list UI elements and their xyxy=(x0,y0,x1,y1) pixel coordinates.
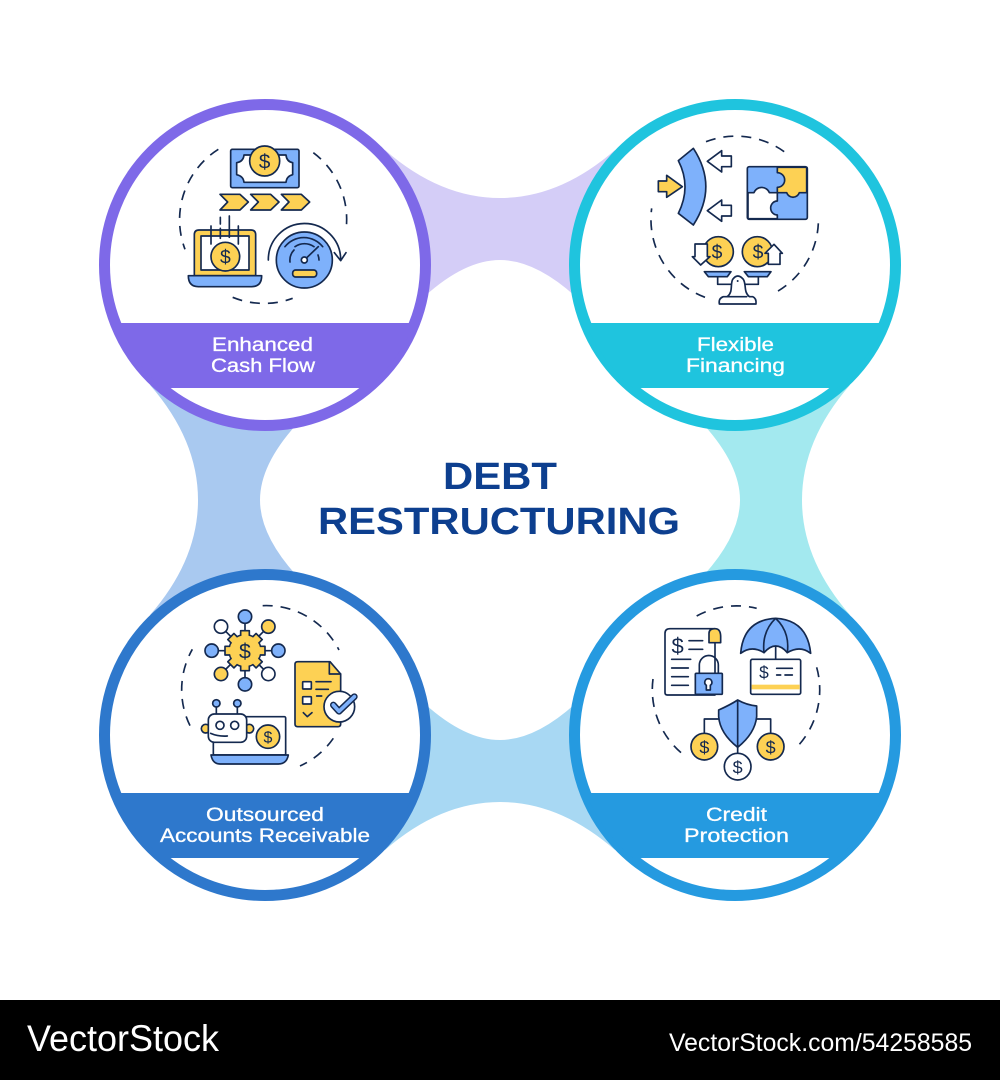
title xyxy=(318,456,680,543)
footer url: VectorStock.com/54258585 xyxy=(669,1029,972,1057)
footer bar xyxy=(0,1000,1000,1080)
icon: flexible financing: $ xyxy=(753,243,764,264)
banner: Flexible Financing xyxy=(591,323,879,388)
connector: top xyxy=(385,150,615,296)
icon: cash flow xyxy=(180,146,347,303)
label: Credit Protection: Protection xyxy=(684,826,789,847)
label: Credit Protection: Credit xyxy=(706,805,768,826)
connector: left xyxy=(150,385,296,615)
icon: cash flow: $ xyxy=(220,248,231,269)
connector: right xyxy=(704,385,850,615)
connector: bottom xyxy=(385,704,615,850)
icon: credit protection: $ xyxy=(759,662,769,682)
label: Credit Protection xyxy=(684,805,789,847)
label: Flexible Financing xyxy=(686,335,785,377)
icon: credit protection: $ xyxy=(699,737,709,757)
icon: credit protection: $ xyxy=(733,757,743,777)
icon: credit protection: $ xyxy=(672,633,684,658)
banner: Enhanced Cash Flow xyxy=(121,323,409,388)
label: Outsourced Accounts Receivable: Outsourced xyxy=(206,805,324,826)
icon: outsourced receivables: $ xyxy=(239,639,251,663)
panel: Outsourced Accounts Receivable xyxy=(100,574,430,896)
icon: flexible financing: $ xyxy=(712,243,723,264)
icon: credit protection: $ xyxy=(766,737,776,757)
label: Flexible Financing: Flexible xyxy=(697,335,774,356)
icon: flexible financing xyxy=(651,136,818,304)
banner: Outsourced Accounts Receivable xyxy=(121,793,409,858)
icon: outsourced receivables: $ xyxy=(264,729,273,746)
banner: Credit Protection xyxy=(591,793,879,858)
title: RESTRUCTURING xyxy=(318,501,680,543)
icon: credit protection xyxy=(652,606,820,780)
footer logo text: VectorStock xyxy=(27,1018,219,1059)
icon: outsourced receivables xyxy=(182,606,355,766)
panel: Flexible Financing xyxy=(570,104,900,426)
label: Enhanced Cash Flow: Cash Flow xyxy=(211,356,315,377)
icon: cash flow: $ xyxy=(259,150,271,173)
label: Outsourced Accounts Receivable xyxy=(160,805,370,847)
panel: Enhanced Cash Flow xyxy=(100,104,430,426)
label: Enhanced Cash Flow: Enhanced xyxy=(212,335,313,356)
label: Outsourced Accounts Receivable: Accounts Receivable xyxy=(160,826,370,847)
label: Enhanced Cash Flow xyxy=(211,335,315,377)
panel: Credit Protection xyxy=(570,574,900,896)
title: DEBT xyxy=(443,456,557,498)
label: Flexible Financing: Financing xyxy=(686,356,785,377)
